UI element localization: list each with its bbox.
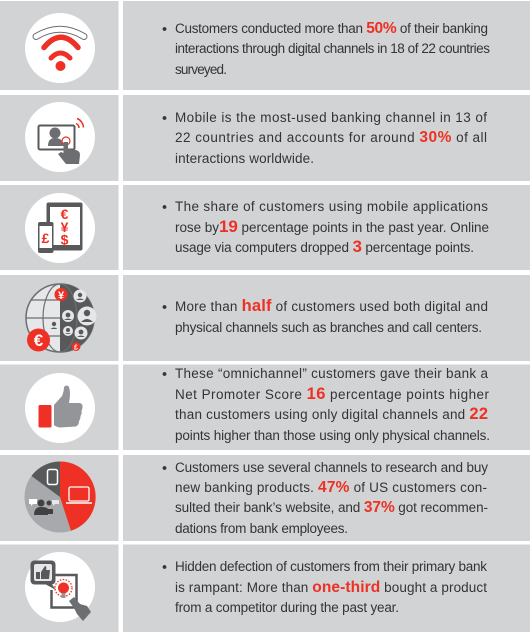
text: omnichannel: These “omnichannel” customers gave their bank a (175, 366, 488, 381)
text: omnichannel: points higher than those using only physical channels. (175, 428, 490, 443)
text: research channels: sulted their bank’s website, and 37% got recommen- (175, 499, 488, 516)
text: hidden defection: is rampant: More than one-third bought a product (175, 579, 487, 596)
text: research channels: new banking products. 47% of US customers con- (175, 479, 487, 496)
icon: tablet and phone with currencies (25, 193, 95, 263)
text: research channels (163, 460, 488, 536)
text: digital channels: interactions through digital channels in 18 of 22 countries (175, 41, 490, 56)
panel: mobile row (0, 95, 530, 181)
text: research channels: dations from bank employees. (175, 521, 348, 536)
text: mobile banking: Mobile is the most-used banking channel in 13 of (175, 110, 487, 125)
text: both channels: physical channels such as branches and call centers. (175, 320, 482, 335)
text: omnichannel: than customers using only digital channels and 22 (175, 405, 488, 423)
text: digital channels: Customers conducted more than 50% of their banking (175, 20, 488, 37)
icon: tablet and phone with currencies: € (61, 206, 69, 222)
text: mobile applications: The share of customers using mobile applications (175, 199, 488, 214)
panel: omnichannel row (0, 364, 530, 450)
panel: wifi row (0, 1, 530, 90)
text: mobile applications: usage via computers dropped 3 percentage points. (175, 237, 474, 256)
text: hidden defection (163, 559, 487, 615)
text: hidden defection: Hidden defection of customers from their primary bank (175, 559, 487, 574)
icon: globe with people: £ (74, 344, 78, 352)
text: digital channels: surveyed. (175, 62, 227, 77)
icon: globe with people: ¥ (58, 290, 65, 302)
panel: both channels row (0, 275, 530, 361)
text: mobile banking (163, 110, 487, 166)
icon: tablet and phone with currencies: ¥ (61, 219, 69, 235)
icon: tablet and phone with currencies: $ (61, 232, 69, 248)
text: mobile applications: rose by19 percentage points in the past year. Online (175, 217, 489, 236)
icon: tablet with touch (25, 102, 95, 172)
panel: mobile applications row (0, 185, 530, 270)
text: mobile applications (163, 199, 489, 256)
icon: tablet and phone with currencies: £ (42, 230, 50, 246)
text: research channels: Customers use several channels to research and buy (175, 460, 488, 475)
text: mobile banking: 22 countries and accounts for around 30% of all (175, 129, 487, 146)
text: omnichannel: Net Promoter Score 16 percentage points higher (175, 385, 490, 403)
icon: tablet with speech bubble and bulb (25, 552, 95, 622)
icon: thumbs up (25, 373, 95, 443)
text: hidden defection: from a competitor during the past year. (175, 600, 399, 615)
panel: research row (0, 455, 530, 541)
text: both channels (163, 297, 488, 335)
text: omnichannel (163, 366, 490, 443)
text: both channels: More than half of customers used both digital and (175, 297, 488, 315)
icon: globe with people: € (34, 331, 44, 350)
panel: defection row (0, 544, 530, 632)
icon: globe with people (26, 284, 96, 352)
text: digital channels (163, 20, 490, 77)
icon: wifi (25, 13, 95, 83)
text: mobile banking: interactions worldwide. (175, 151, 314, 166)
icon: channel pie chart (24, 461, 96, 532)
